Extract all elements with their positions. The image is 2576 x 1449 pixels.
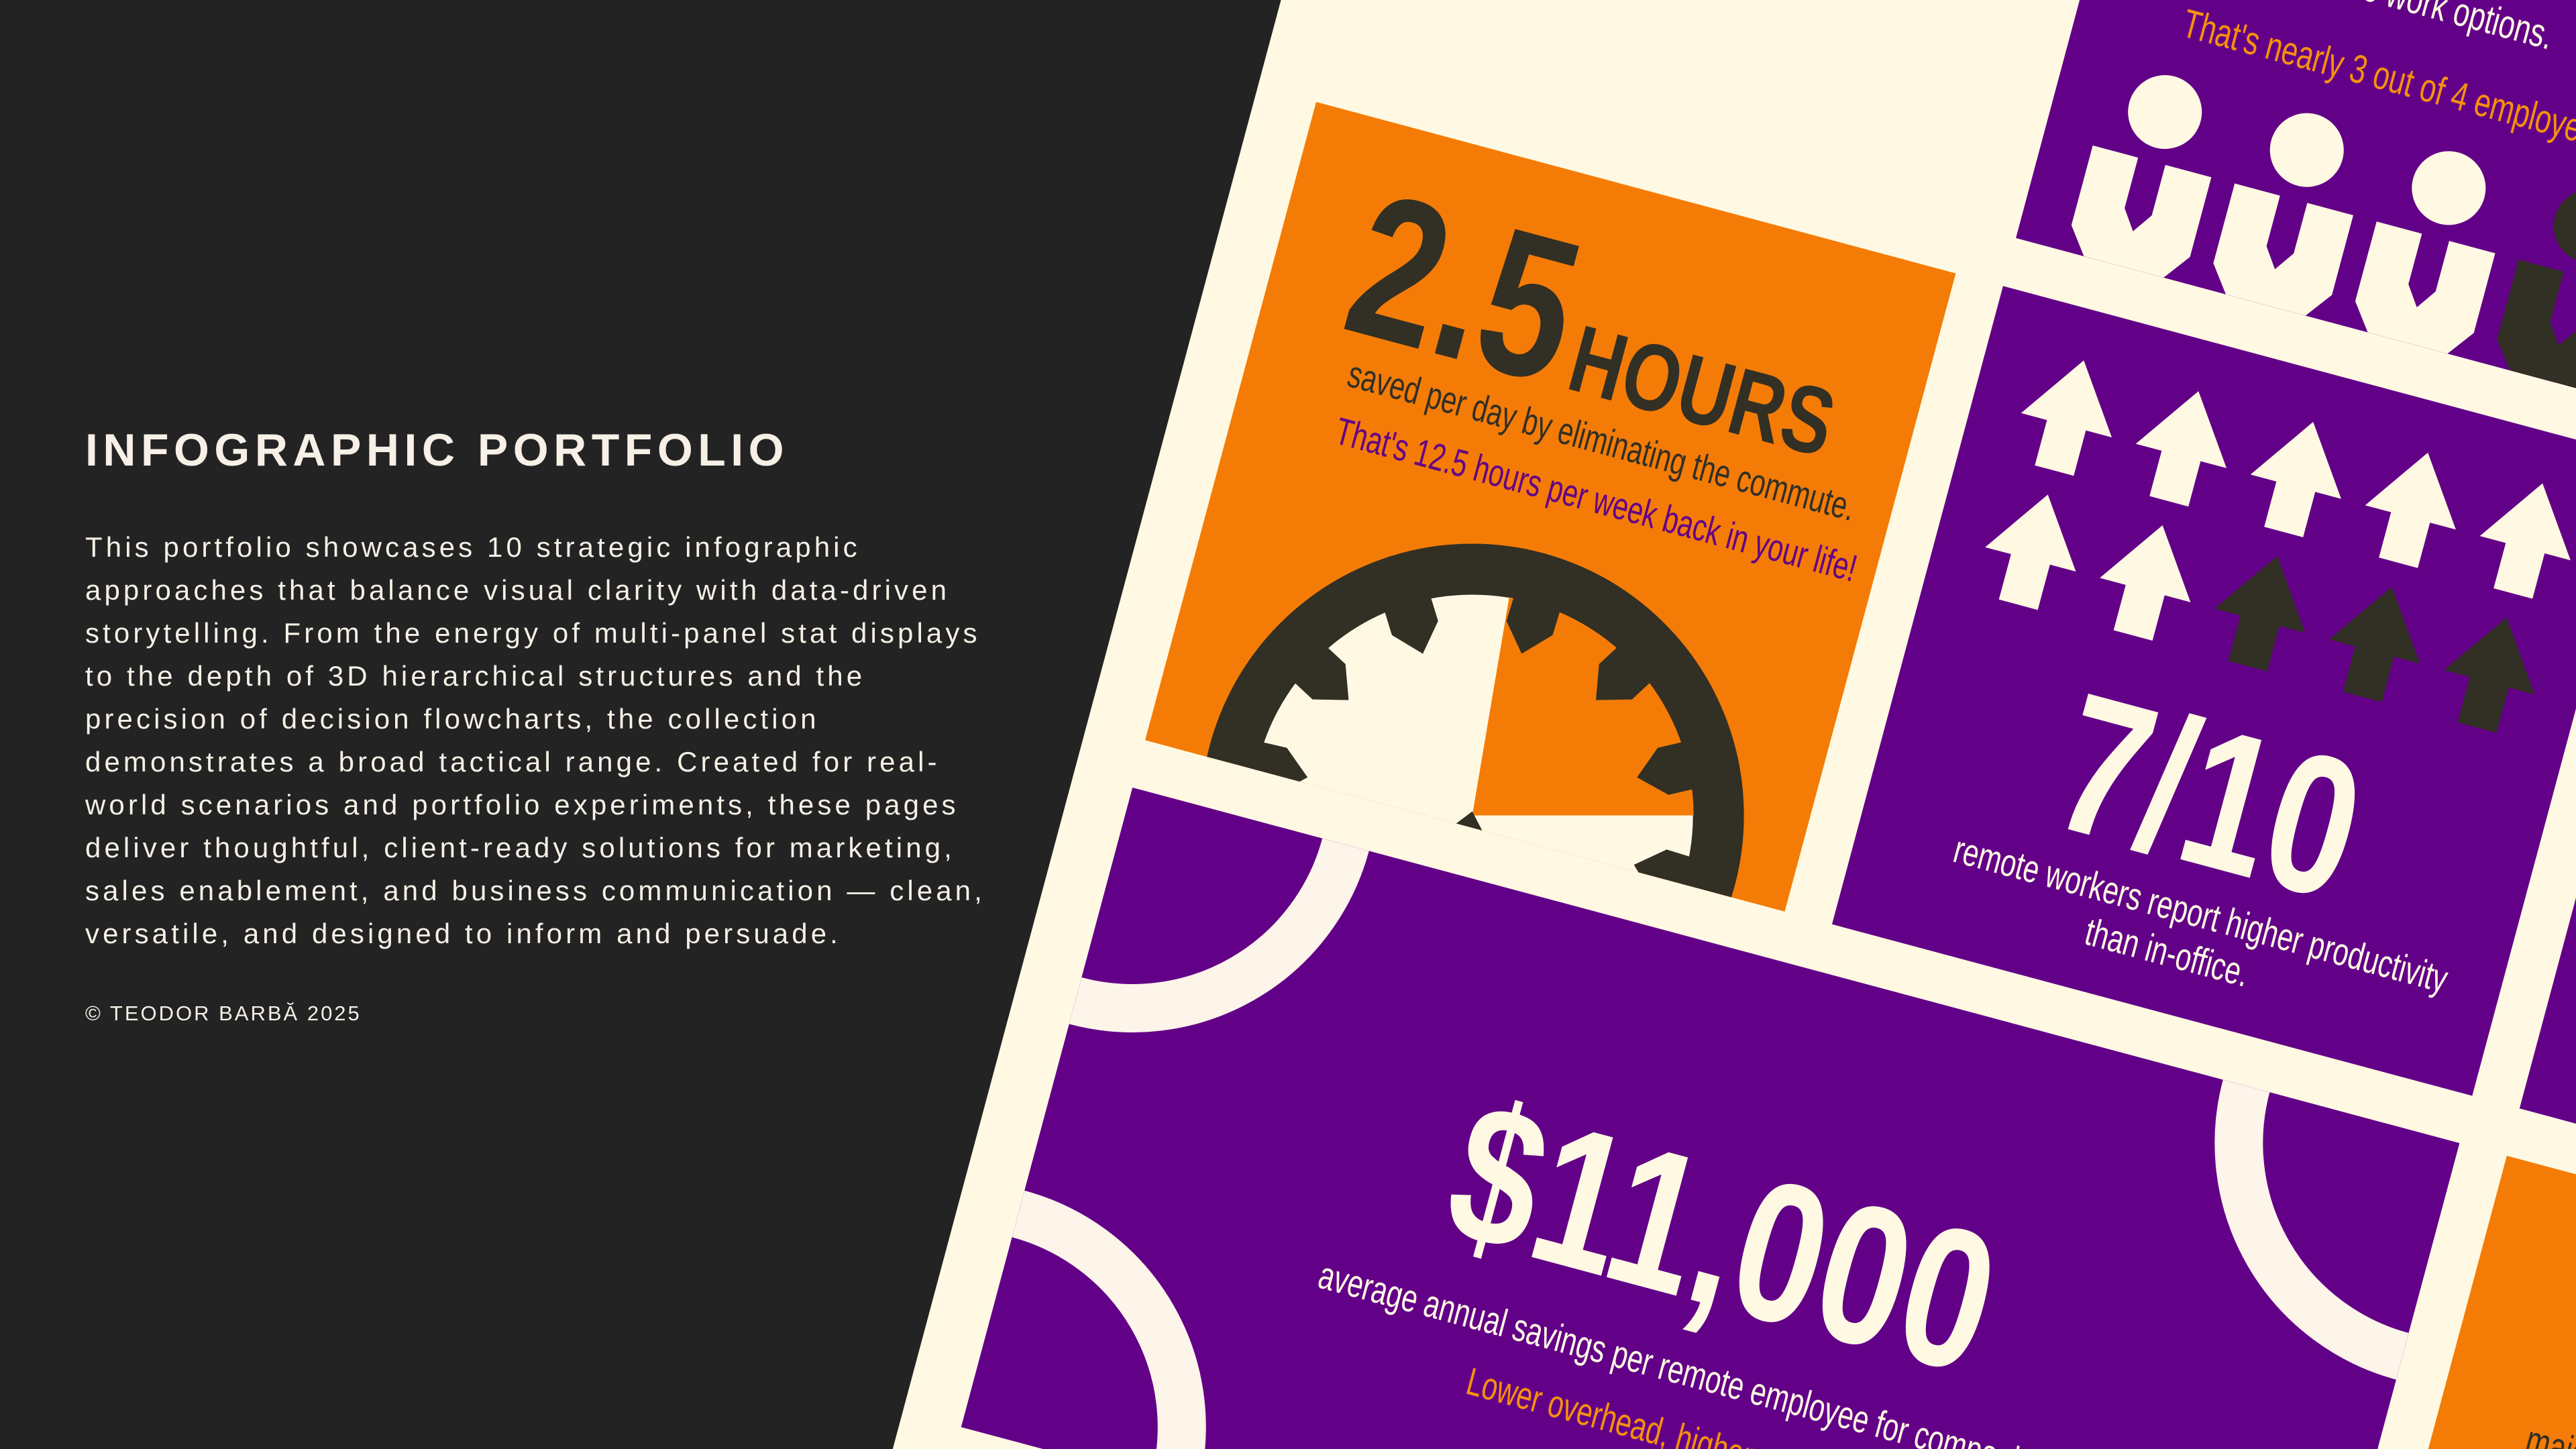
body text: versatile, and designed to inform and persuade. (85, 918, 841, 949)
subtext: saved per day: saved per day by eliminating the commute. (1343, 352, 1860, 529)
panel: productivity 7/10 (1832, 286, 2576, 1095)
callout: 12.5 hours per week: That's 12.5 hours per week back in your life! (1331, 410, 1862, 590)
body text: world scenarios and portfolio experiments, these pages (85, 789, 959, 820)
panel: column 3 purple (2520, 0, 2576, 1280)
arrow icons (1985, 360, 2571, 733)
subtext: productivity: remote workers report higher productivity (1949, 827, 2452, 1002)
body text: This portfolio showcases 10 strategic infographic (85, 531, 861, 563)
copyright: © TEODOR BARBĂ 2025 (85, 1002, 362, 1025)
body text: precision of decision flowcharts, the collection (85, 703, 820, 735)
body text: to the depth of 3D hierarchical structures and the (85, 660, 865, 692)
big stat 7/10: 7/10 (2036, 651, 2383, 942)
body text: approaches that balance visual clarity with data-driven (85, 574, 950, 606)
panel: column 3 orange (2335, 1156, 2576, 1449)
body text: demonstrates a broad tactical range. Created for real- (85, 746, 941, 777)
people icons (2072, 75, 2576, 388)
panel: productivity 7/10: than in-office. (2081, 910, 2254, 996)
panel: remote preference (people) (2016, 0, 2576, 410)
panel: commute hours (orange) (1145, 102, 1955, 912)
title: INFOGRAPHIC PORTFOLIO (85, 425, 789, 476)
decorative corner rings (1012, 839, 2408, 1449)
body text (85, 531, 985, 949)
panel: annual savings $11,000 (961, 788, 2459, 1449)
big stat 2.5 HOURS: 2.5HOURS (1328, 149, 1845, 478)
body text: sales enablement, and business communication — clean, (85, 875, 985, 906)
body text: storytelling. From the energy of multi-panel stat displays (85, 617, 981, 649)
big stat $11,000: $11,000 (1428, 1059, 2018, 1415)
body text: deliver thoughtful, client-ready solutions for marketing, (85, 832, 955, 863)
gauge icon (1207, 543, 1744, 898)
dark left background (0, 0, 1518, 1449)
